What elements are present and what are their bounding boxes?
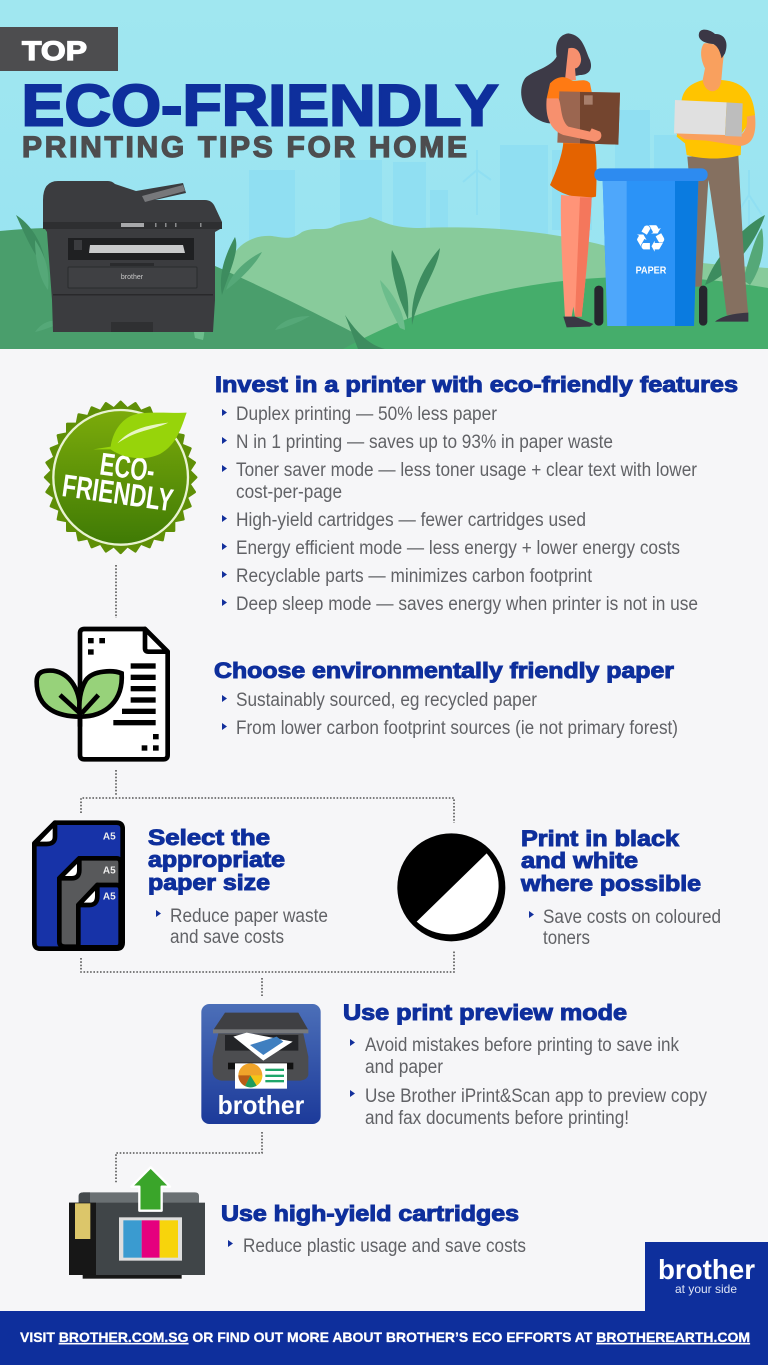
icon: brother app: brother xyxy=(218,1090,304,1120)
section: high-yield cartridges xyxy=(221,1201,526,1257)
heading: Choose environmentally friendly paper xyxy=(214,658,674,683)
heading: paper size xyxy=(148,870,270,895)
section: print in black and white xyxy=(520,826,721,949)
printer: brother xyxy=(121,274,144,281)
bullet list: Sustainably sourced, eg recycled paper xyxy=(236,690,538,711)
heading xyxy=(148,825,285,895)
bullet list xyxy=(222,690,678,739)
icon: A5 paper sizes: A5 xyxy=(103,832,116,843)
man with paper stack xyxy=(674,30,755,322)
footer bar: VISIT BROTHER.COM.SG OR FIND OUT MORE ABOUT BROTHER’S ECO EFFORTS AT BROTHEREARTH.COM xyxy=(20,1329,750,1345)
bullet list: Deep sleep mode — saves energy when printer is not in use xyxy=(236,594,698,615)
bullet list: From lower carbon footprint sources (ie not primary forest) xyxy=(236,718,678,739)
bullets: and paper xyxy=(365,1057,444,1078)
bullet list: Toner saver mode — less toner usage + clear text with lower xyxy=(236,460,698,481)
icon: brother app xyxy=(201,1004,321,1124)
connector lines xyxy=(81,565,454,1183)
bullet: Reduce plastic usage and save costs xyxy=(243,1236,526,1257)
bullets xyxy=(350,1035,707,1129)
bullet list: Energy efficient mode — less energy + lower energy costs xyxy=(236,538,680,559)
woman with box xyxy=(521,33,620,327)
heading: Invest in a printer with eco-friendly features xyxy=(215,372,738,397)
bullet: Save costs on coloured xyxy=(543,907,721,928)
bullet list: Recyclable parts — minimizes carbon footprint xyxy=(236,566,593,587)
front hill xyxy=(343,277,768,349)
back hill xyxy=(230,217,768,348)
heading: Use print preview mode xyxy=(343,1000,627,1025)
icon: high-yield cartridge xyxy=(69,1167,205,1279)
bullets: Use Brother iPrint&Scan app to preview copy xyxy=(365,1086,707,1107)
heading: Select the xyxy=(148,825,270,850)
bullet: and save costs xyxy=(170,927,284,948)
bullet list: High-yield cartridges — fewer cartridges used xyxy=(236,510,586,531)
hero banner xyxy=(0,0,768,349)
heading: and white xyxy=(521,848,638,873)
heading: Use high-yield cartridges xyxy=(221,1201,519,1226)
printer xyxy=(43,181,222,332)
bullet list: cost-per-page xyxy=(236,482,342,503)
icon: A5 paper sizes xyxy=(34,823,123,949)
recycling bin: PAPER xyxy=(636,265,667,276)
section: environmentally friendly paper xyxy=(214,658,678,739)
icon: eco-friendly badge: ECO- xyxy=(98,446,157,489)
brother logo panel: brother xyxy=(658,1254,755,1285)
icon: black and white circle xyxy=(397,833,505,941)
bullet list: N in 1 printing — saves up to 93% in paper waste xyxy=(236,432,613,453)
subtitle: PRINTING TIPS FOR HOME xyxy=(22,131,467,164)
icon: A5 paper sizes: A5 xyxy=(103,866,116,877)
heading: appropriate xyxy=(148,847,285,872)
bullet: toners xyxy=(543,928,590,949)
section: invest in eco-friendly printer xyxy=(215,372,738,615)
bullet list xyxy=(222,404,698,615)
brother logo panel: at your side xyxy=(675,1282,737,1296)
bullet xyxy=(529,907,721,949)
icon: paper with leaves xyxy=(37,629,168,759)
bullets: and fax documents before printing! xyxy=(365,1108,629,1129)
main title: ECO-FRIENDLY xyxy=(22,74,498,138)
bullets: Avoid mistakes before printing to save ink xyxy=(365,1035,679,1056)
heading xyxy=(520,826,701,896)
recycling bin xyxy=(594,168,708,326)
heading: Print in black xyxy=(521,826,680,851)
footer bar xyxy=(0,1311,768,1365)
icon: eco-friendly badge: FRIENDLY xyxy=(60,467,176,518)
section: select paper size xyxy=(148,825,328,948)
grass clumps xyxy=(16,215,765,349)
icon: eco-friendly badge xyxy=(45,402,196,553)
brother logo panel xyxy=(645,1242,768,1311)
recycling bin: ♻ xyxy=(634,217,667,261)
icon: A5 paper sizes: A5 xyxy=(103,892,116,903)
section: print preview xyxy=(343,1000,707,1129)
bullet: Reduce paper waste xyxy=(170,906,328,927)
left hill xyxy=(0,228,385,349)
heading: where possible xyxy=(520,871,701,896)
city skyline xyxy=(249,110,762,240)
bullet xyxy=(156,906,328,948)
title tag: top xyxy=(0,27,118,71)
title tag: top: TOP xyxy=(22,36,87,66)
bullet list: Duplex printing — 50% less paper xyxy=(236,404,498,425)
